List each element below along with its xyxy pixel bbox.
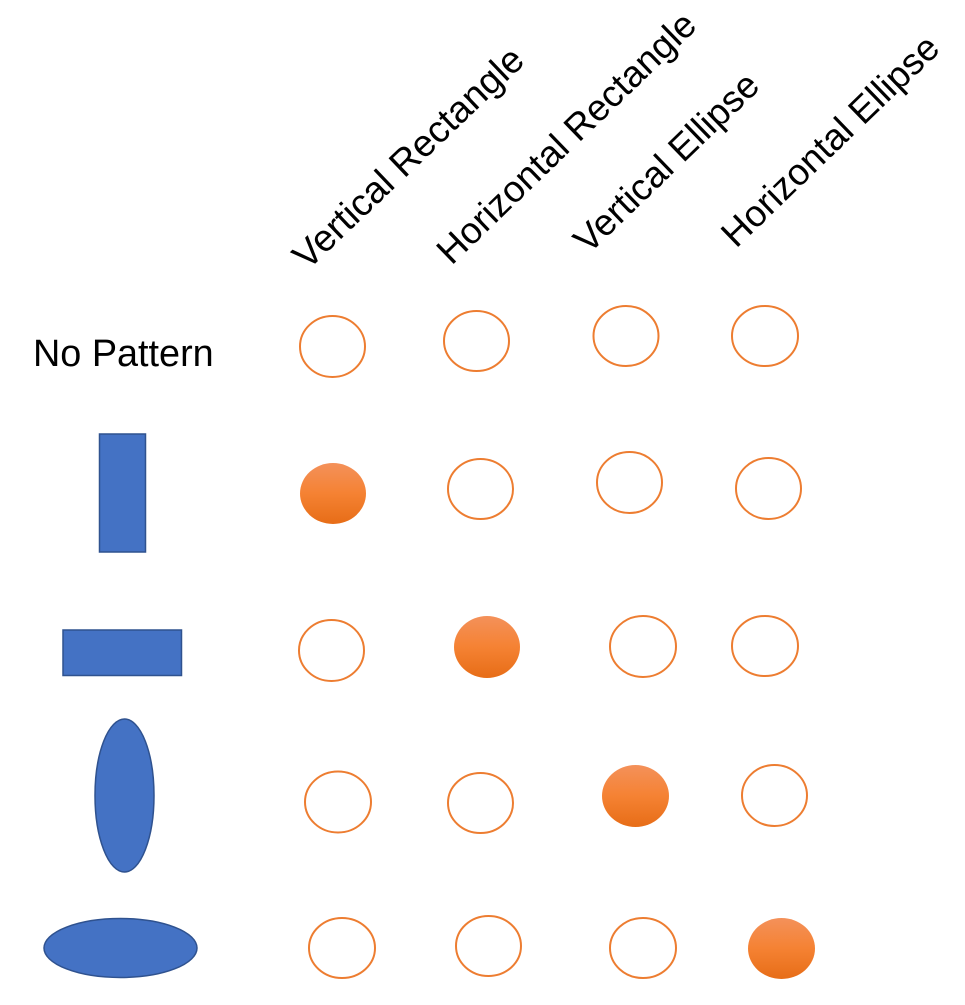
icon: vertical rectangle bbox=[100, 434, 146, 552]
icon: horizontal rectangle bbox=[63, 630, 182, 676]
header: Vertical Ellipse: Vertical Ellipse bbox=[566, 64, 767, 261]
header: Horizontal Ellipse: Horizontal Ellipse bbox=[713, 27, 947, 255]
header: Vertical Rectangle: Vertical Rectangle bbox=[284, 38, 532, 277]
row label: No Pattern: No Pattern bbox=[33, 333, 214, 375]
outlined circles bbox=[299, 306, 807, 978]
column headers bbox=[284, 4, 947, 277]
icon: vertical ellipse bbox=[95, 719, 154, 872]
filled circles bbox=[300, 463, 815, 979]
icon: horizontal ellipse bbox=[44, 918, 197, 978]
header: Horizontal Rectangle: Horizontal Rectangle bbox=[429, 4, 704, 272]
